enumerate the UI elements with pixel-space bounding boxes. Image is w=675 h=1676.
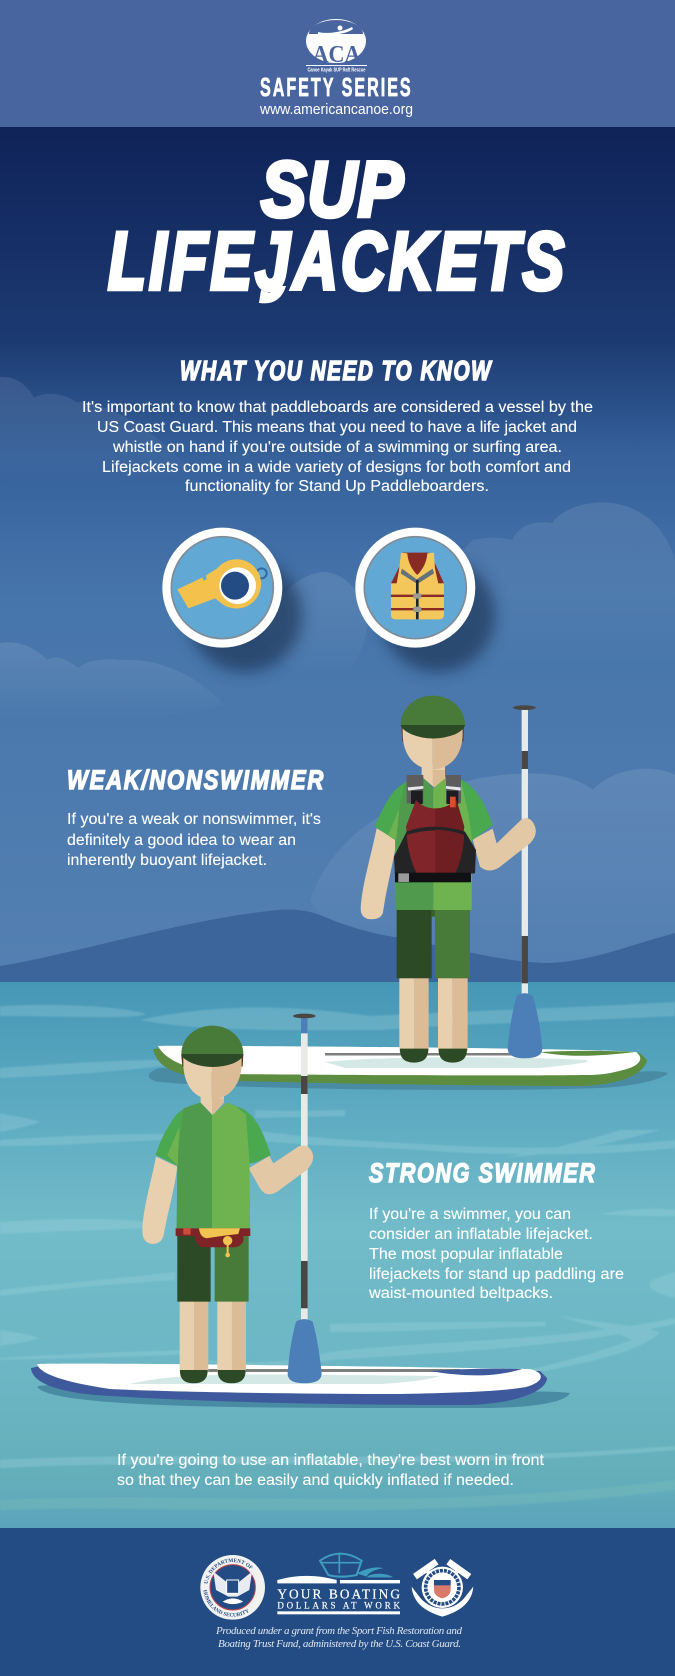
right arm — [249, 1146, 313, 1194]
logo: homeland security seal — [200, 1555, 265, 1620]
lifejacket — [394, 775, 476, 882]
paddle — [508, 705, 542, 1058]
logo: your boating dollars at work — [277, 1553, 400, 1614]
inflatable tip text: If you're going to use an inflatable, they're best worn in front — [117, 1452, 545, 1469]
intro paragraph: US Coast Guard. This means that you need to have a life jacket and — [97, 419, 577, 436]
weak swimmer text: inherently buoyant lifejacket. — [67, 852, 267, 869]
head with cap — [401, 696, 465, 787]
heading: strong swimmer: STRONG SWIMMER — [369, 1159, 596, 1189]
intro paragraph — [82, 399, 593, 495]
sky background — [0, 127, 675, 983]
footer — [200, 1552, 474, 1650]
shirt — [375, 776, 493, 910]
ACA logo: Canoe Kayak SUP Raft Rescue — [308, 68, 366, 74]
head with cap — [181, 1026, 243, 1115]
title: LIFEJACKETS — [108, 216, 567, 307]
icon: life jacket — [355, 528, 495, 672]
paddle — [288, 1014, 322, 1383]
strong swimmer text: The most popular inflatable — [369, 1246, 563, 1263]
heading: weak/nonswimmer: WEAK/NONSWIMMER — [67, 766, 325, 796]
logo: your boating dollars at work: DOLLARS AT WORK — [277, 1600, 400, 1610]
shorts — [177, 1233, 249, 1302]
left arm — [142, 1157, 177, 1244]
clouds — [0, 377, 675, 960]
icon: whistle — [162, 528, 302, 672]
inflatable tip text: so that they can be easily and quickly inflated if needed. — [117, 1472, 514, 1489]
strong swimmer text: lifejackets for stand up paddling are — [369, 1266, 624, 1283]
right arm — [473, 818, 536, 870]
water ripples — [0, 1002, 675, 1510]
person: weak swimmer with buoyant lifejacket — [361, 696, 542, 1063]
heading: what you need to know: WHAT YOU NEED TO KNOW — [180, 356, 492, 387]
title: SUP — [261, 147, 404, 233]
shorts — [397, 908, 470, 978]
left arm — [361, 828, 397, 919]
water — [0, 982, 675, 1528]
beltpack — [176, 1228, 250, 1257]
intro paragraph: It's important to know that paddleboards are considered a vessel by the — [82, 399, 593, 416]
logo: homeland security seal: U.S. DEPARTMENT OF — [204, 1558, 253, 1584]
ACA logo — [306, 19, 367, 74]
person: strong swimmer with beltpack — [142, 1014, 322, 1383]
board: green — [149, 1046, 668, 1090]
title — [108, 147, 567, 307]
weak swimmer text: If you're a weak or nonswimmer, it's — [67, 811, 321, 828]
funding credit — [215, 1625, 462, 1650]
logo: your boating dollars at work: YOUR BOATING — [277, 1586, 400, 1601]
intro paragraph: functionality for Stand Up Paddleboarders. — [185, 478, 489, 495]
intro paragraph: whistle on hand if you're outside of a swimming or surfing area. — [112, 439, 562, 456]
website: www.americancanoe.org — [259, 102, 413, 118]
strong swimmer text: If you're a swimmer, you can — [369, 1206, 571, 1223]
inflatable tip text — [117, 1452, 545, 1489]
legs and shoes — [399, 977, 468, 1063]
weak swimmer text: definitely a good idea to wear an — [67, 832, 296, 849]
intro paragraph: Lifejackets come in a wide variety of designs for both comfort and — [102, 459, 571, 476]
weak swimmer text — [67, 811, 321, 869]
funding credit: Boating Trust Fund, administered by the U.S. Coast Guard. — [218, 1638, 461, 1650]
mountains — [0, 909, 675, 983]
strong swimmer text: waist-mounted beltpacks. — [368, 1285, 553, 1302]
shirt — [156, 1103, 271, 1228]
ACA logo: ACA — [312, 42, 361, 68]
funding credit: Produced under a grant from the Sport Fish Restoration and — [215, 1625, 462, 1637]
strong swimmer text: consider an inflatable lifejacket. — [369, 1226, 593, 1243]
legs and shoes — [180, 1300, 246, 1383]
header band — [0, 0, 675, 127]
board: blue — [31, 1364, 570, 1408]
safety series label: SAFETY SERIES — [260, 72, 413, 102]
logo: coast guard — [412, 1562, 473, 1617]
strong swimmer text — [368, 1206, 624, 1302]
logo: homeland security seal: HOMELAND SECURITY — [203, 1590, 249, 1617]
